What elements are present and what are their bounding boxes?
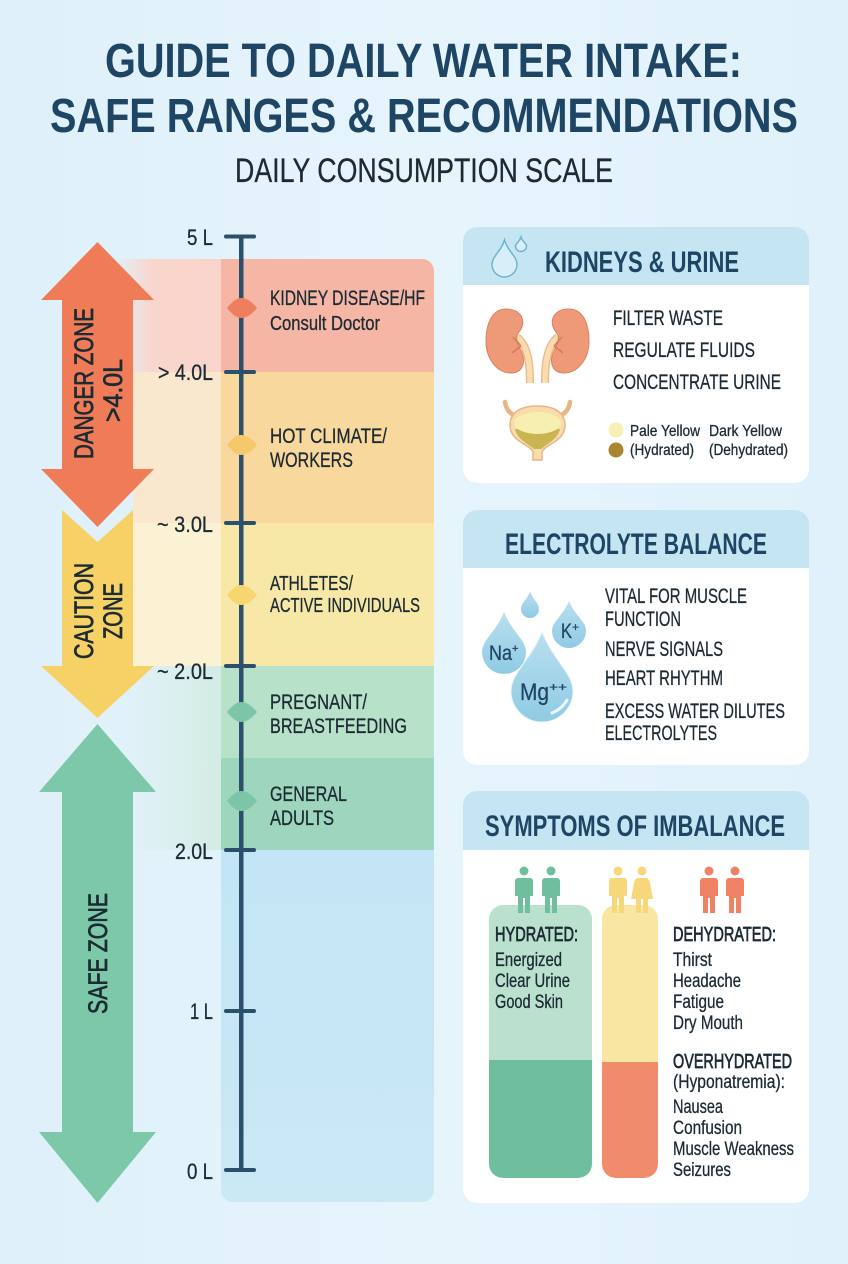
electrolyte functions list: FUNCTION (605, 608, 681, 631)
urine colour legend: Dark Yellow (709, 423, 782, 440)
zone background fades (115, 259, 221, 850)
dehydrated symptoms (673, 924, 776, 1034)
axis labels: 1 L (190, 999, 213, 1024)
overhydrated symptoms: (Hyponatremia): (673, 1072, 785, 1093)
kidney functions list: REGULATE FLUIDS (613, 339, 755, 362)
icon: bladder (505, 402, 570, 460)
overhydrated symptoms: Muscle Weakness (673, 1139, 794, 1160)
urine colour legend: (Dehydrated) (709, 442, 788, 459)
hydrated symptoms: Good Skin (495, 992, 563, 1013)
title (50, 35, 798, 143)
hydrated symptoms: Energized (495, 950, 562, 971)
icon: electrolyte drops: Mg (520, 679, 549, 706)
panel: consumption scale bands (221, 259, 434, 1202)
icon: electrolyte drops: ++ (549, 680, 567, 694)
scale labels: PREGNANT/ (270, 691, 367, 714)
scale labels: Consult Doctor (270, 313, 380, 335)
scale labels: ATHLETES/ (270, 573, 353, 595)
arrow: safe zone (39, 724, 156, 1203)
axis labels (157, 225, 213, 1184)
panel: kidneys and urine (463, 227, 809, 483)
panel: electrolyte balance (463, 510, 809, 765)
urine colour legend: (Hydrated) (630, 442, 694, 459)
urine colour legend: Pale Yellow (630, 423, 700, 440)
dehydrated symptoms: Thirst (673, 950, 713, 971)
overhydrated symptoms: Seizures (673, 1160, 731, 1181)
icon: hydrated people (515, 866, 560, 913)
icon: red people (700, 866, 744, 913)
kidney functions list: CONCENTRATE URINE (613, 371, 781, 394)
arrow: danger zone: DANGER ZONE (69, 308, 99, 459)
axis scale (224, 234, 256, 1172)
electrolyte functions list: VITAL FOR MUSCLE (605, 585, 747, 608)
scale labels: ADULTS (270, 807, 334, 830)
scale labels: KIDNEY DISEASE/HF (270, 287, 425, 310)
electrolyte functions list (605, 585, 785, 745)
overhydrated column bar (602, 905, 658, 1178)
urine colour legend (608, 422, 788, 459)
axis labels: ~ 3.0L (157, 512, 213, 537)
scale labels: GENERAL (270, 783, 347, 806)
dehydrated symptoms: DEHYDRATED: (673, 924, 776, 946)
hydrated symptoms (495, 924, 578, 1013)
icon: yellow people (609, 866, 653, 913)
kidney functions list (613, 307, 781, 394)
overhydrated symptoms: OVERHYDRATED (673, 1051, 792, 1073)
icon: kidneys (486, 309, 589, 383)
heading: kidneys and urine: KIDNEYS & URINE (545, 246, 739, 279)
axis labels: > 4.0L (158, 360, 213, 385)
arrow: safe zone: SAFE ZONE (83, 893, 113, 1014)
arrow: caution zone: CAUTION (69, 563, 99, 659)
scale labels: WORKERS (270, 449, 353, 472)
arrow: caution zone (41, 510, 154, 718)
panel: symptoms of imbalance (463, 791, 809, 1203)
overhydrated symptoms (673, 1051, 794, 1181)
dehydrated symptoms: Dry Mouth (673, 1013, 743, 1034)
scale labels: ACTIVE INDIVIDUALS (270, 595, 420, 617)
overhydrated symptoms: Confusion (673, 1118, 742, 1139)
axis labels: 2.0L (175, 839, 213, 864)
kidney functions list: FILTER WASTE (613, 307, 723, 330)
icon: electrolyte drops: + (512, 643, 518, 655)
dehydrated symptoms: Headache (673, 971, 741, 992)
subtitle: DAILY CONSUMPTION SCALE (235, 152, 613, 190)
icon: electrolyte drops: K (561, 620, 572, 643)
hydrated symptoms: HYDRATED: (495, 924, 578, 946)
arrow: caution zone: ZONE (98, 583, 128, 639)
hydrated symptoms: Clear Urine (495, 971, 570, 992)
electrolyte functions list: HEART RHYTHM (605, 667, 723, 690)
icon: water drops (492, 237, 526, 277)
axis labels: 5 L (187, 225, 213, 250)
icon: electrolyte drops (482, 591, 586, 722)
icon: electrolyte drops: + (572, 620, 579, 634)
axis labels: ~ 2.0L (157, 659, 213, 684)
axis labels: 0 L (187, 1159, 213, 1184)
icon: electrolyte drops: Na (489, 642, 512, 665)
overhydrated symptoms: Nausea (673, 1097, 723, 1118)
arrow: danger zone: >4.0L (98, 359, 128, 422)
scale labels: HOT CLIMATE/ (270, 425, 387, 448)
electrolyte functions list: ELECTROLYTES (605, 722, 717, 745)
dehydrated symptoms: Fatigue (673, 992, 724, 1013)
scale labels (270, 287, 425, 830)
arrow: danger zone (41, 242, 154, 527)
axis markers (227, 298, 257, 811)
electrolyte functions list: NERVE SIGNALS (605, 638, 723, 661)
hydrated column bar (489, 905, 592, 1178)
scale labels: BREASTFEEDING (270, 715, 407, 738)
